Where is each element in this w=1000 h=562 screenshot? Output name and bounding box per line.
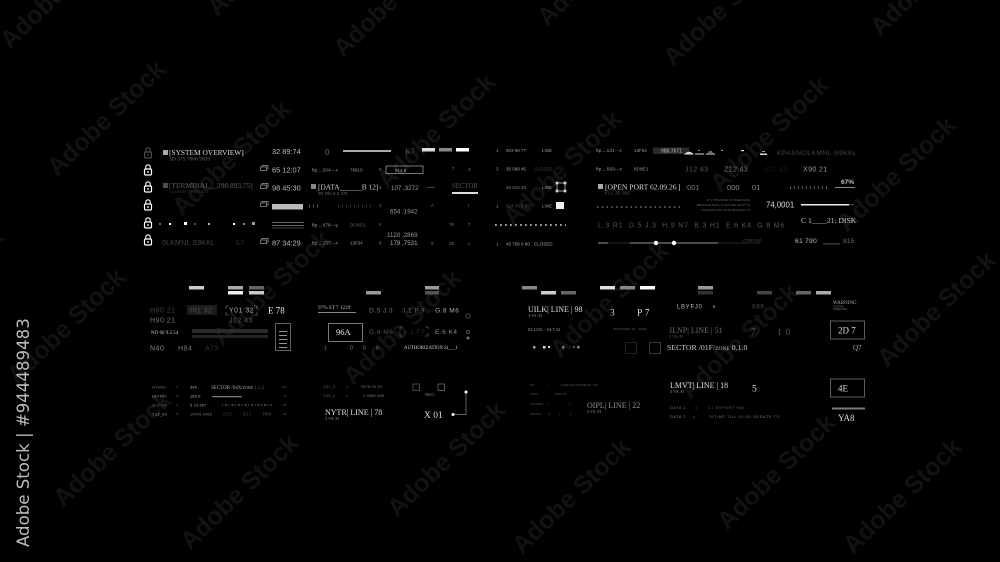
faint table: I bbox=[548, 383, 549, 387]
watermarks: Adobe Stock bbox=[872, 246, 1000, 372]
index column: 6 bbox=[379, 222, 382, 227]
watermarks: Adobe Stock bbox=[207, 225, 336, 351]
ftp list: 13F54 bbox=[634, 148, 647, 153]
faint table: SAMPLING STERM FIN, 343 bbox=[561, 383, 598, 387]
heading: open port bbox=[598, 182, 681, 196]
table rows bbox=[323, 385, 384, 398]
empty squares bbox=[626, 342, 660, 354]
watermarks: Adobe Stock bbox=[545, 237, 674, 363]
tick strip bbox=[222, 404, 272, 406]
watermarks: Adobe Stock bbox=[338, 264, 467, 390]
slider: CODE 316 bbox=[743, 238, 761, 242]
number row: 0 bbox=[350, 346, 353, 352]
timestamps: 87 34:29 bbox=[272, 238, 301, 248]
table rows: = bbox=[346, 385, 349, 389]
icon: target frame bbox=[556, 182, 566, 192]
heading: open port: ] bbox=[678, 182, 681, 192]
line heading: JLNP bbox=[669, 326, 723, 339]
sector label: SECTOR /04X/ZONE 1.1.2 bbox=[211, 386, 265, 391]
slider bbox=[598, 238, 761, 245]
panel: middle right bbox=[522, 286, 864, 354]
timestamps: 65 12:07 bbox=[272, 166, 301, 174]
Q7: Q7 bbox=[853, 344, 862, 352]
scattered characters: I bbox=[468, 203, 469, 208]
box: 4E: 4E bbox=[838, 384, 848, 394]
table rows: JCZI U0 bbox=[152, 404, 167, 408]
panel: top right: J12 43 bbox=[685, 164, 708, 174]
heading: terminal: ADDRESS 77 NET 8215 bbox=[170, 190, 209, 194]
panel: top right bbox=[596, 148, 857, 245]
icon: white square bbox=[556, 202, 564, 209]
panel: middle right: 689. bbox=[752, 304, 767, 310]
dim codes: G73 bbox=[223, 412, 232, 416]
box: 2D 7: 2D 7 bbox=[838, 326, 856, 336]
connector bbox=[452, 390, 468, 416]
highlighted value bbox=[653, 148, 689, 154]
watermarks: Adobe Stock bbox=[48, 386, 177, 512]
X 01: X 01 bbox=[424, 411, 443, 421]
faint table: 1 bbox=[569, 402, 571, 406]
binary strip: :001 bbox=[685, 183, 700, 192]
data rows: = bbox=[695, 406, 698, 410]
authorization label: AUTHORIZATION St___1 bbox=[404, 346, 458, 351]
indicator bars bbox=[422, 148, 469, 152]
panel: top left status: S7 bbox=[235, 238, 244, 247]
faint table: FIRST bbox=[530, 392, 538, 396]
panel: top right: X90 21 bbox=[803, 164, 828, 174]
table rows bbox=[152, 386, 212, 416]
stripe bars bbox=[192, 329, 268, 338]
line list: LINE bbox=[542, 204, 552, 208]
index column: 9 bbox=[379, 240, 382, 246]
timestamps: 32 89:74 bbox=[272, 147, 301, 156]
table rows: 0375 00 29 bbox=[361, 385, 382, 389]
panel: bottom centre bbox=[323, 384, 468, 421]
table rows: = bbox=[176, 412, 179, 416]
table rows: LBYFJ0 bbox=[152, 394, 167, 398]
code labels: H90 21 bbox=[150, 318, 176, 324]
side stock id: Adobe Stock | #944489483 bbox=[14, 318, 33, 547]
empty squares bbox=[413, 384, 444, 390]
box: 4E bbox=[830, 379, 864, 397]
code grid: G.8 M6 bbox=[435, 308, 459, 314]
table rows: 5 10.957 bbox=[190, 404, 206, 408]
percent readout: 67% bbox=[841, 179, 854, 186]
tick strip bbox=[309, 204, 372, 208]
data heading: [DATA______B 12] bbox=[318, 182, 378, 192]
ftp list: ftp....593---x bbox=[596, 166, 622, 172]
line heading: JLNP: 3 VS /J3 bbox=[669, 334, 683, 339]
line heading: OIPL: 3 VS /J3 bbox=[587, 409, 601, 414]
line list: CLOSED bbox=[534, 166, 553, 172]
zero and bar: 0 bbox=[325, 148, 330, 157]
side codes bbox=[282, 385, 287, 416]
index column bbox=[379, 167, 382, 246]
value box bbox=[386, 166, 423, 174]
table rows: 1 9284 495 bbox=[363, 394, 384, 398]
dotted line bbox=[597, 206, 682, 208]
code grid: B.1 F7 bbox=[403, 329, 425, 336]
line list: 3 bbox=[496, 166, 499, 172]
watermarks: Adobe Stock bbox=[167, 95, 296, 221]
panel: bottom left table bbox=[152, 385, 287, 416]
panel: middle right: P 7 bbox=[637, 308, 650, 318]
heading: open port: ID 1. 35 .605 bbox=[605, 190, 630, 196]
meter bar bbox=[212, 396, 242, 397]
white progress bar bbox=[801, 204, 854, 206]
line list: 1 bbox=[496, 242, 499, 246]
table rows: C01_1 bbox=[323, 385, 335, 389]
faint table: = bbox=[548, 402, 550, 406]
ftp list bbox=[312, 168, 366, 246]
ftp list bbox=[596, 148, 649, 172]
number row: : bbox=[390, 346, 391, 352]
watermarks: Adobe Stock bbox=[832, 111, 961, 237]
panel: top right: Z12 43 bbox=[724, 164, 748, 174]
icons: locks bbox=[144, 148, 152, 245]
dotted line bbox=[495, 224, 566, 226]
scattered characters: 35 bbox=[449, 241, 455, 246]
scattered characters: 4 bbox=[468, 167, 471, 172]
table rows: 345 bbox=[190, 386, 197, 390]
table rows: YU2_89 bbox=[152, 412, 167, 416]
data rows: DATA 1 bbox=[670, 406, 686, 410]
code grid: J.1 P.9 bbox=[402, 308, 425, 314]
heading: terminal: [TERMINAL__298.893.75] bbox=[169, 181, 253, 190]
code labels: Y01 32 bbox=[229, 308, 254, 314]
code labels bbox=[150, 305, 254, 352]
small notes: AT 1 FTDM FIND IN OTHER DATA bbox=[707, 198, 750, 202]
line list: LINE bbox=[542, 148, 552, 153]
line heading: LMVT: LMVT| LINE | 18 bbox=[670, 381, 728, 390]
ftp list: ftp....131---z bbox=[596, 148, 622, 154]
sector label: SECTOR /01F/ZONE 0.1.0 bbox=[667, 343, 747, 352]
warning label: WARNING bbox=[833, 301, 857, 306]
faint table: H bbox=[548, 412, 550, 416]
panel: middle right: NETWORK 20 : 0000 bbox=[613, 327, 647, 331]
binary strip bbox=[685, 183, 760, 192]
number row: 0 bbox=[376, 346, 379, 352]
ftp list: 13F54 bbox=[350, 240, 363, 246]
scattered characters: 8 bbox=[431, 241, 434, 246]
note label: NO 60 9.2.54 bbox=[151, 331, 179, 336]
line heading: OIPL: OIPL| LINE | 22 bbox=[587, 401, 640, 410]
data rows: 1 / EXPORT IND bbox=[708, 406, 745, 410]
table rows: = bbox=[176, 404, 179, 408]
line heading: NYTR bbox=[325, 408, 382, 421]
warning label: SYSTEM bbox=[833, 306, 843, 308]
value box: 914.6 bbox=[395, 168, 407, 173]
faint table: 1 bbox=[559, 412, 561, 416]
table rows: 19445,0485 bbox=[190, 412, 212, 416]
box: 2D 7 bbox=[830, 321, 864, 339]
log label: 02 LOG - 54.7.32 bbox=[528, 327, 560, 332]
bars bbox=[272, 204, 304, 228]
line list: 35 098 45 bbox=[506, 166, 527, 172]
indicator bars bbox=[189, 286, 439, 294]
side codes: w bbox=[284, 394, 287, 398]
digit 5: 5 bbox=[752, 384, 757, 394]
scattered characters bbox=[431, 166, 471, 246]
numeric readouts: 654 ,1942 bbox=[390, 208, 418, 216]
faint table: CELT ES bbox=[530, 412, 542, 416]
watermarks: Adobe Stock bbox=[175, 429, 304, 555]
highlighted value: 988.7671 bbox=[661, 148, 682, 154]
heading: open port: [OPEN PORT 62.09.26 bbox=[605, 182, 677, 192]
line list: LINE bbox=[542, 185, 552, 190]
percent readout bbox=[835, 179, 855, 188]
panel: top centre data bbox=[311, 147, 566, 247]
bracket bbox=[226, 306, 257, 315]
line heading: UILK bbox=[528, 305, 583, 318]
line list: 803 98 77 bbox=[506, 148, 527, 153]
digits: 7 bbox=[751, 328, 756, 338]
bracket bbox=[400, 327, 428, 336]
numeric readouts: 179 ,7531 bbox=[390, 240, 418, 247]
code labels: J12 43 bbox=[229, 318, 253, 324]
data heading: 30 785 8.2 471 bbox=[318, 191, 349, 196]
data rows: DITIME TILL 02.09.25/DATE TO bbox=[709, 415, 780, 419]
panel: top centre data: K7 bbox=[405, 147, 415, 156]
table rows: C03_2 bbox=[323, 394, 335, 398]
dim codes bbox=[223, 412, 272, 416]
binary strip: 01 bbox=[752, 183, 760, 192]
line list: 45 768 0 98 bbox=[506, 242, 530, 246]
icon: level meter bbox=[276, 324, 290, 350]
underlined percent note bbox=[318, 305, 356, 313]
watermarks: Adobe Stock bbox=[42, 55, 171, 181]
small notes: MESSAGE, PATH, IT HAS THE RIGHT TO bbox=[697, 203, 751, 207]
watermarks: Adobe Stock bbox=[507, 433, 636, 559]
sector label: SECTOR bbox=[452, 183, 478, 190]
watermarks: Adobe Stock bbox=[382, 396, 511, 522]
code grid: D.5 J.3 bbox=[369, 308, 393, 314]
panel: middle centre bbox=[318, 305, 470, 352]
ftp list: DOOE1 bbox=[350, 222, 366, 228]
code labels: I01 32 bbox=[190, 308, 212, 314]
ftp list: 8DNE1 bbox=[634, 166, 649, 172]
warning label bbox=[833, 301, 857, 311]
faint table: F/H bbox=[530, 383, 535, 387]
index column: 2 bbox=[379, 185, 382, 190]
line heading: NYTR: 3 VS /J3 bbox=[325, 416, 339, 421]
icons: windows bbox=[260, 165, 268, 244]
line list: CLOSED bbox=[534, 242, 553, 246]
faint table: TERM NS bbox=[554, 392, 567, 396]
timestamps bbox=[272, 147, 301, 248]
timestamps: 98 45:30 bbox=[272, 184, 301, 192]
box: 96A: 96A bbox=[336, 327, 352, 337]
code strings: KPASNOLKMNL S9KKL bbox=[777, 150, 857, 157]
faint table: CHANNEL bbox=[530, 402, 544, 406]
code labels: H84 bbox=[178, 346, 192, 352]
underlined percent note: 97% ST 7 1229' bbox=[318, 305, 351, 311]
dim code label: 0LKMNL S9KKL bbox=[162, 240, 215, 247]
rec label: REC bbox=[425, 392, 435, 397]
ftp list: 78810 bbox=[350, 168, 363, 172]
numeric readouts: 1120 ,2869 bbox=[387, 232, 418, 239]
small notes bbox=[697, 198, 751, 212]
readout 74,0001: 74,0001 bbox=[766, 200, 794, 210]
table rows: 189.0 bbox=[190, 394, 201, 398]
disk label: C 1____21: DISK bbox=[801, 216, 857, 225]
code grid: G.8 M6 bbox=[369, 329, 393, 336]
numeric readouts bbox=[387, 185, 419, 247]
line list: 1 bbox=[496, 204, 499, 208]
bottom readout: 61 790 bbox=[795, 238, 817, 245]
line heading: OIPL bbox=[587, 401, 640, 414]
dim codes: R84 bbox=[263, 412, 272, 416]
line list: 45 012 33 bbox=[506, 185, 527, 190]
YA8 label: YA8 bbox=[838, 413, 855, 423]
table rows: HYKN3 bbox=[152, 386, 166, 390]
panel: middle left bbox=[150, 286, 439, 352]
line list bbox=[496, 148, 553, 246]
waveform marks bbox=[684, 150, 767, 155]
number row bbox=[324, 346, 391, 352]
line heading: UILK: UILK| LINE | 98 bbox=[528, 305, 583, 314]
faint table: 1 bbox=[570, 412, 572, 416]
watermarks: Adobe Stock bbox=[675, 278, 804, 404]
line heading: LMVT: 3 VS /J3 bbox=[670, 389, 684, 394]
small notes: PROCESS DATA TITLE REQUEST TO bbox=[702, 208, 751, 212]
watermarks: Adobe Stock bbox=[2, 263, 131, 389]
data rows bbox=[670, 406, 780, 419]
panel: top right: 815 bbox=[843, 238, 855, 245]
indicator bars bbox=[522, 286, 831, 294]
dim codes: D17 bbox=[243, 412, 252, 416]
line heading: UILK: 3 VS /J3 bbox=[528, 313, 542, 318]
code row: L.3 R1 D.5 J.3 H.9 N7 B.3 H1 E.6 K4 G.8 M6 bbox=[598, 222, 785, 230]
line heading: JLNP: JLNP| LINE | 51 bbox=[669, 326, 723, 335]
divider bar bbox=[832, 408, 865, 410]
heading: terminal bbox=[163, 181, 253, 194]
watermarks: Adobe Stock bbox=[705, 71, 834, 197]
number row: 0 bbox=[363, 346, 366, 352]
ftp list: ftp....678---y bbox=[312, 222, 338, 228]
code labels: H90 21 bbox=[150, 308, 176, 314]
panel: middle right: 1 0 bbox=[777, 328, 791, 338]
heading: system overview: ID 375 7866 9820 bbox=[170, 156, 210, 162]
ftp list: ftp....204---x bbox=[312, 168, 338, 174]
index column: 0 bbox=[379, 167, 382, 172]
code label: LBYFJ0 bbox=[677, 304, 703, 310]
sector label bbox=[427, 183, 478, 194]
code grid: E.6 K4 bbox=[435, 329, 458, 336]
index column: 1 bbox=[379, 203, 382, 208]
side codes: a1 bbox=[283, 403, 287, 407]
data rows: DATA 2 bbox=[670, 415, 686, 419]
table rows: = bbox=[346, 394, 349, 398]
warning label: OVERLOAD bbox=[833, 308, 847, 311]
box: 96A bbox=[328, 324, 362, 342]
watermarks: Adobe Stock bbox=[838, 433, 967, 559]
scattered characters: A bbox=[431, 203, 434, 208]
scattered characters: 76 bbox=[449, 222, 455, 227]
code labels: N40 bbox=[150, 346, 164, 352]
line list: 624 78 9 56 bbox=[506, 204, 530, 208]
code grid bbox=[369, 308, 459, 336]
binary strip: 000 bbox=[727, 183, 740, 192]
line heading: NYTR: NYTR| LINE | 78 bbox=[325, 408, 382, 417]
scattered characters: 7 bbox=[468, 222, 471, 227]
data rows: = bbox=[693, 415, 696, 419]
side codes: ok bbox=[283, 412, 287, 416]
data heading bbox=[311, 182, 378, 196]
line list: 1 bbox=[496, 148, 499, 153]
watermarks: Adobe Stock bbox=[498, 105, 627, 231]
numeric readouts: 107 ,3272 bbox=[391, 185, 419, 192]
side nodes bbox=[466, 314, 470, 339]
table rows: = bbox=[176, 394, 179, 398]
scattered characters: c bbox=[468, 241, 471, 246]
panel: top left status bbox=[144, 147, 372, 248]
panel: bottom right bbox=[530, 379, 865, 423]
heading: system overview: [SYSTEM OVERVIEW] bbox=[169, 148, 244, 157]
faint table bbox=[530, 383, 598, 416]
ftp list: ftp....157---x bbox=[312, 240, 338, 246]
side codes: ce1 bbox=[282, 385, 287, 389]
dot row bbox=[533, 346, 580, 348]
scattered characters: 7 bbox=[452, 166, 455, 171]
watermarks: Adobe Stock bbox=[372, 68, 501, 194]
watermarks: Adobe Stock bbox=[712, 409, 841, 535]
dot row bbox=[159, 222, 255, 225]
number row: 1 bbox=[324, 346, 327, 352]
table rows: = bbox=[176, 386, 179, 390]
heading: system overview bbox=[163, 148, 244, 162]
digits: 3 bbox=[610, 308, 615, 318]
code labels: A73 bbox=[205, 346, 219, 352]
E 78 label: E 78 bbox=[268, 306, 285, 316]
line heading: LMVT bbox=[670, 381, 728, 394]
panel: top right: J12 43 bbox=[764, 164, 787, 174]
